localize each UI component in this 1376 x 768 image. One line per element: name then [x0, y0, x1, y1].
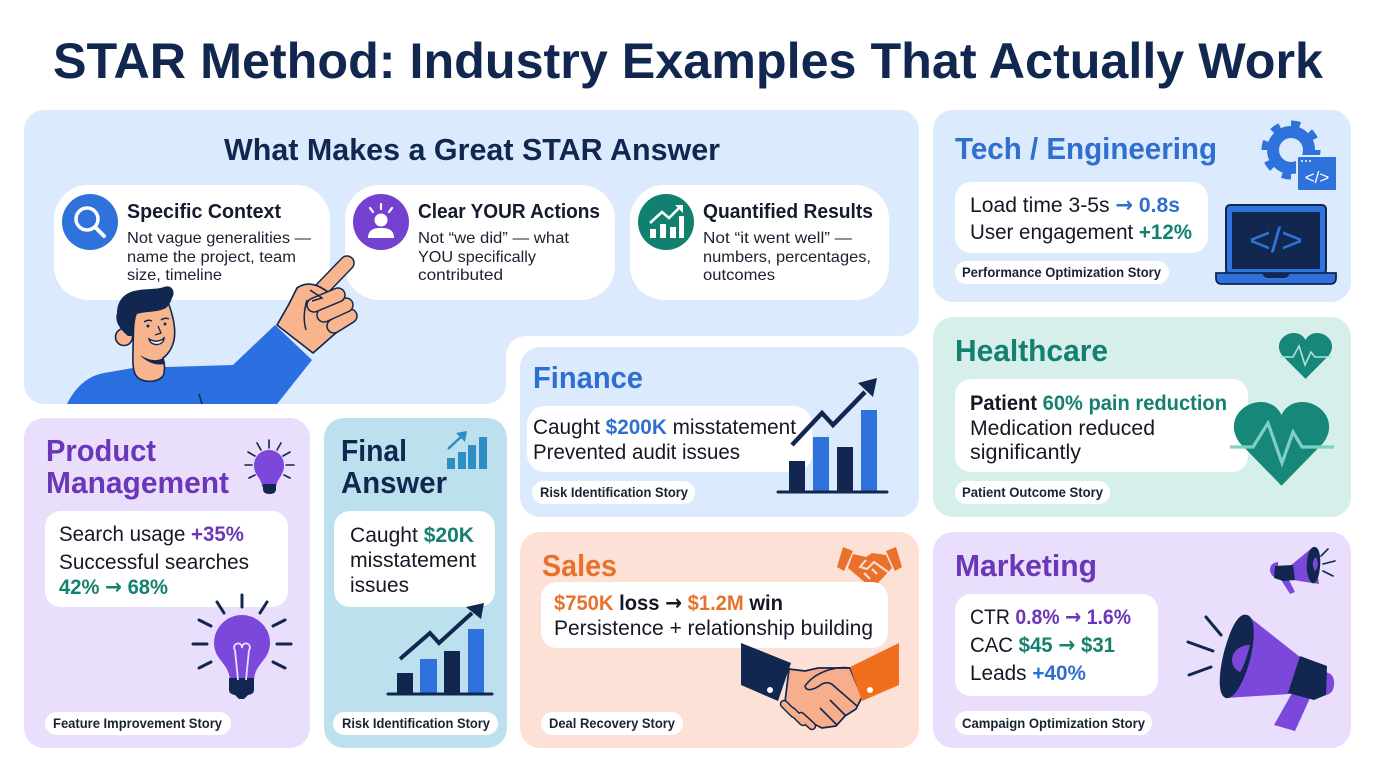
metrics card	[955, 182, 1208, 253]
icon: magnifying glass	[62, 194, 118, 250]
metrics card: misstatement	[350, 548, 476, 572]
card: clear your actions: YOU specifically	[418, 249, 536, 266]
icon: big heart with pulse	[1230, 402, 1334, 486]
story tag: Performance Optimization Story	[962, 265, 1161, 280]
metrics card: CTR 0.8% → 1.6%	[970, 605, 1131, 630]
icon: small bar chart with arrow	[447, 431, 487, 469]
metrics card: User engagement +12%	[970, 220, 1192, 244]
metrics card: Leads +40%	[970, 661, 1086, 685]
illustration: man pointing	[67, 263, 350, 404]
icon: growth chart	[638, 194, 694, 250]
story tag: Risk Identification Story	[342, 716, 490, 731]
panel: finance	[520, 347, 919, 517]
metrics card: issues	[350, 573, 409, 597]
story tag: Patient Outcome Story	[962, 485, 1103, 500]
story tag	[955, 711, 1152, 735]
heading	[46, 433, 229, 500]
story tag: Risk Identification Story	[540, 485, 688, 500]
panel: tech / engineering	[933, 110, 1351, 302]
heading: Final	[341, 433, 407, 468]
icon: small orange handshake	[837, 547, 902, 585]
panel: healthcare: Healthcare	[955, 333, 1108, 368]
chart: rising bars with arrow	[778, 378, 887, 492]
heading: Answer	[341, 465, 447, 500]
panel: finance: Finance	[533, 360, 643, 395]
story tag: Campaign Optimization Story	[962, 716, 1145, 731]
panel: sales: Sales	[542, 548, 617, 583]
icon: person with spark	[353, 194, 409, 250]
metrics card	[955, 379, 1248, 472]
title: STAR Method: Industry Examples That Actually Work	[53, 33, 1323, 89]
card: clear your actions: Clear YOUR Actions	[418, 201, 600, 223]
card: specific context	[54, 185, 330, 300]
story tag: Deal Recovery Story	[549, 716, 675, 731]
icon: small megaphone	[1270, 547, 1335, 594]
icon: large light bulb	[193, 595, 291, 699]
story tag	[955, 261, 1169, 284]
heading: Product	[46, 433, 156, 468]
metrics card: Search usage +35%	[59, 522, 244, 546]
story tag	[333, 712, 498, 735]
panel: sales	[520, 532, 919, 748]
metrics card: Caught $20K	[350, 523, 474, 547]
icon: laptop with code	[1216, 205, 1336, 284]
story tag	[955, 481, 1110, 504]
metrics card: Medication reduced	[970, 416, 1155, 440]
story tag	[45, 712, 231, 735]
metrics card	[955, 594, 1158, 696]
icon: gear and code window: </>	[1305, 168, 1329, 187]
card: specific context: size, timeline	[127, 267, 222, 284]
metrics card: Load time 3-5s → 0.8s	[970, 193, 1180, 218]
panel: healthcare	[933, 317, 1351, 517]
panel: what makes a great STAR answer	[24, 110, 919, 404]
card: quantified results: Quantified Results	[703, 201, 873, 223]
panel: product management	[24, 418, 310, 748]
metrics card: Successful searches	[59, 550, 249, 574]
card: clear your actions: contributed	[418, 267, 503, 284]
panel: marketing	[933, 532, 1351, 748]
metrics card: 42% → 68%	[59, 575, 168, 600]
card: clear your actions	[345, 185, 615, 300]
metrics card	[45, 511, 288, 607]
card: quantified results: outcomes	[703, 267, 775, 284]
icon: small heart	[1279, 333, 1332, 379]
panel: final answer	[324, 418, 507, 748]
icon: gear and code window	[1265, 124, 1337, 191]
panel: marketing: Marketing	[955, 548, 1097, 583]
card: specific context: Specific Context	[127, 201, 281, 223]
metrics card	[334, 511, 495, 607]
card: quantified results: Not “it went well” —	[703, 230, 852, 247]
heading	[341, 433, 447, 500]
metrics card: Prevented audit issues	[533, 440, 740, 464]
chart: rising bars with arrow	[388, 603, 492, 694]
card: clear your actions: Not “we did” — what	[418, 230, 570, 247]
icon: laptop with code: </>	[1249, 221, 1303, 260]
metrics card	[527, 406, 812, 472]
panel: tech / engineering: Tech / Engineering	[955, 131, 1217, 166]
metrics card: Persistence + relationship building	[554, 616, 873, 640]
metrics card: CAC $45 → $31	[970, 633, 1115, 658]
metrics card	[541, 582, 888, 648]
illustration: business handshake	[741, 643, 899, 728]
icon: small light bulb	[245, 440, 294, 494]
metrics card: $750K loss → $1.2M win	[554, 591, 783, 616]
card: specific context: Not vague generalities —	[127, 230, 311, 247]
story tag	[532, 481, 695, 504]
card: quantified results: numbers, percentages,	[703, 249, 871, 266]
card: quantified results	[630, 185, 889, 300]
card: specific context: name the project, team	[127, 249, 296, 266]
metrics card: Caught $200K misstatement	[533, 415, 796, 439]
icon: big megaphone	[1188, 615, 1334, 731]
heading: Management	[46, 465, 229, 500]
metrics card: Patient 60% pain reduction	[970, 391, 1227, 415]
story tag: Feature Improvement Story	[53, 716, 222, 731]
metrics card: significantly	[970, 440, 1081, 464]
panel heading: What Makes a Great STAR Answer	[224, 132, 720, 167]
story tag	[541, 712, 683, 735]
